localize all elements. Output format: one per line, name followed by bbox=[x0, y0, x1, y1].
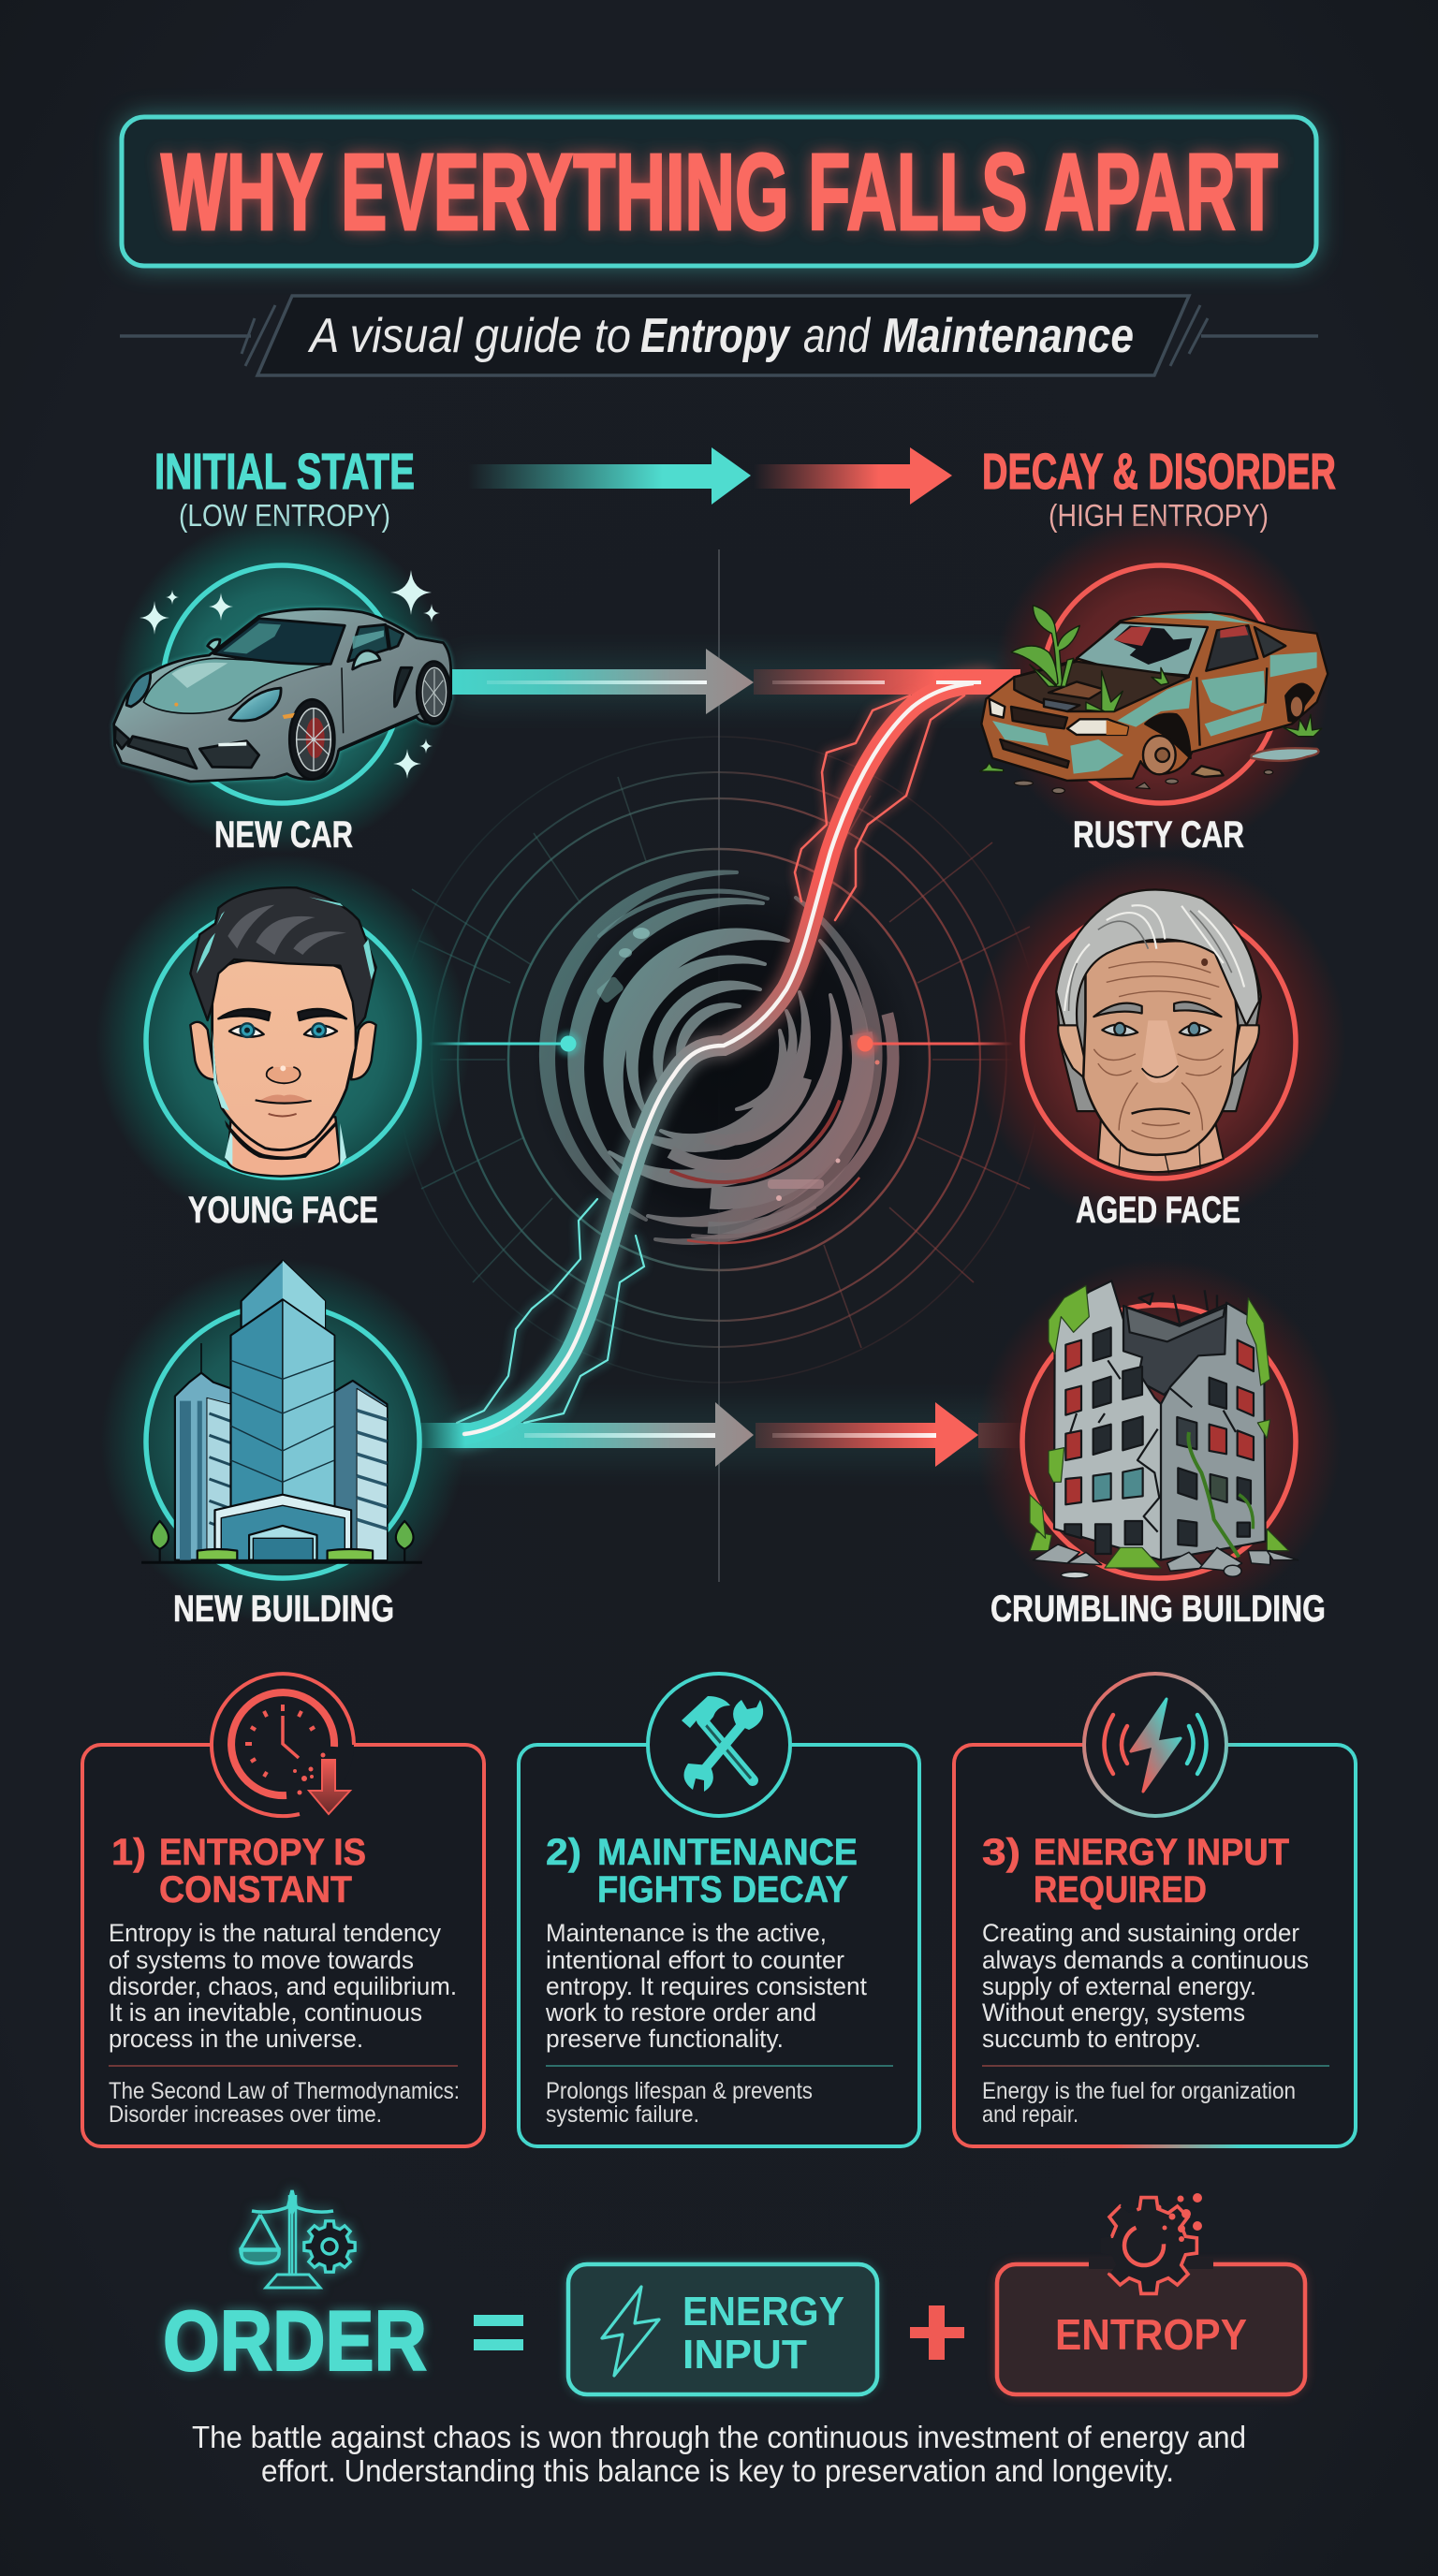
sparkles bbox=[139, 570, 440, 779]
card heading: ENERGY INPUT bbox=[1034, 1832, 1289, 1873]
card body: entropy. It requires consistent bbox=[546, 1972, 867, 2000]
nose and mouth bbox=[267, 1067, 301, 1083]
card body bbox=[545, 1919, 867, 2053]
eyes bbox=[229, 1026, 264, 1037]
brows bbox=[218, 1009, 270, 1020]
closing statement bbox=[192, 2420, 1246, 2488]
interior bbox=[1123, 1304, 1229, 1395]
car body bbox=[114, 608, 451, 782]
label: rusty car: RUSTY CAR bbox=[1073, 814, 1244, 856]
wrinkles bbox=[1093, 962, 1224, 1138]
central entropy vortex diagram bbox=[396, 549, 1042, 1582]
label: young face: YOUNG FACE bbox=[188, 1190, 378, 1231]
card body: Entropy is the natural tendency bbox=[109, 1919, 441, 1947]
subtitle banner: Entropy bbox=[640, 309, 791, 363]
card note bbox=[546, 2078, 813, 2128]
label: aged face: AGED FACE bbox=[1076, 1190, 1240, 1231]
card body: disorder, chaos, and equilibrium. bbox=[109, 1972, 457, 2000]
cracks bbox=[1070, 1360, 1236, 1532]
card heading: ENTROPY IS bbox=[159, 1832, 366, 1873]
illustration: aged face bbox=[972, 855, 1346, 1229]
panel: entropy is constant bbox=[82, 1674, 484, 2146]
centre line bbox=[718, 549, 720, 1582]
closing statement: effort. Understanding this balance is key to preservation and longevity. bbox=[261, 2453, 1174, 2488]
equation: entropy box bbox=[997, 2193, 1305, 2394]
card note: systemic failure. bbox=[546, 2101, 699, 2128]
icon: lightning with waves bbox=[1084, 1674, 1226, 1816]
nose and mouth bbox=[1142, 1020, 1179, 1083]
card body: Maintenance is the active, bbox=[546, 1919, 827, 1947]
heading: decay and disorder: (HIGH ENTROPY) bbox=[1049, 498, 1269, 533]
icon: clock with decay arrow bbox=[212, 1674, 354, 1816]
illustration: rusty car bbox=[936, 516, 1329, 853]
row arrow: car bbox=[449, 649, 1016, 714]
card body: intentional effort to counter bbox=[546, 1946, 844, 1974]
card heading: 3) bbox=[982, 1832, 1020, 1873]
card note: Disorder increases over time. bbox=[109, 2101, 382, 2128]
subtitle banner: A visual guide to bbox=[307, 309, 631, 363]
equation: energy input box: ENERGY bbox=[682, 2289, 844, 2334]
row arrow: building bbox=[420, 1402, 1023, 1467]
hair bbox=[190, 887, 376, 1030]
subtitle banner bbox=[120, 296, 1318, 375]
card heading: 1) bbox=[111, 1832, 146, 1873]
card body: of systems to move towards bbox=[109, 1946, 414, 1974]
illustration: new car bbox=[113, 516, 451, 853]
card body bbox=[982, 1919, 1309, 2053]
equation: energy input box bbox=[568, 2264, 877, 2394]
face bbox=[1083, 941, 1238, 1155]
vortex core shadow bbox=[529, 871, 922, 1264]
card body: Without energy, systems bbox=[982, 1998, 1245, 2027]
vines bbox=[1188, 1432, 1239, 1557]
card body: supply of external energy. bbox=[982, 1972, 1256, 2000]
card body: preserve functionality. bbox=[546, 2025, 784, 2053]
vortex lower-right bands bbox=[514, 849, 932, 1266]
right node connector bbox=[852, 1031, 1021, 1057]
right wall bbox=[1161, 1303, 1266, 1560]
car body bbox=[980, 606, 1328, 794]
illustration: crumbling building bbox=[976, 1259, 1342, 1624]
label: new car: NEW CAR bbox=[214, 814, 353, 856]
card body: It is an inevitable, continuous bbox=[109, 1998, 422, 2027]
hair top bbox=[1056, 889, 1259, 1025]
card note bbox=[109, 2078, 460, 2128]
label: new building: NEW BUILDING bbox=[173, 1588, 394, 1630]
card note: Energy is the fuel for organization bbox=[982, 2078, 1296, 2104]
label: crumbling building: CRUMBLING BUILDING bbox=[990, 1588, 1326, 1630]
panel: energy input required bbox=[954, 1674, 1356, 2146]
card note: Prolongs lifespan & prevents bbox=[546, 2078, 813, 2104]
card body: Creating and sustaining order bbox=[982, 1919, 1299, 1947]
red lightning branches bbox=[795, 695, 964, 920]
equation: plus sign bbox=[910, 2305, 964, 2360]
card body: succumb to entropy. bbox=[982, 2025, 1201, 2053]
illustration: young face bbox=[95, 855, 470, 1229]
top gradient arrow bbox=[468, 447, 952, 505]
hair back bbox=[1056, 889, 1261, 1111]
vortex texture specks bbox=[595, 928, 880, 1201]
teal lightning branches bbox=[457, 1199, 644, 1423]
equation: entropy box: ENTROPY bbox=[1055, 2310, 1247, 2359]
card note: The Second Law of Thermodynamics: bbox=[109, 2078, 460, 2104]
card note: and repair. bbox=[982, 2101, 1078, 2128]
illustration: new building bbox=[100, 1259, 465, 1624]
card body: always demands a continuous bbox=[982, 1946, 1309, 1974]
card heading bbox=[982, 1832, 1289, 1910]
left wall bbox=[1054, 1281, 1161, 1560]
subtitle banner: and bbox=[803, 309, 872, 363]
card heading: REQUIRED bbox=[1034, 1869, 1207, 1910]
card note bbox=[982, 2078, 1296, 2128]
rubble bbox=[1033, 1544, 1299, 1578]
heading: initial state bbox=[154, 444, 415, 533]
icon: lightning bbox=[602, 2287, 659, 2376]
windows bbox=[1064, 1327, 1254, 1554]
card body bbox=[109, 1919, 457, 2053]
brows bbox=[1093, 1003, 1142, 1017]
plants bbox=[980, 606, 1322, 771]
vortex swirl bbox=[541, 871, 881, 1243]
debris and puddle bbox=[1252, 748, 1319, 761]
radar rings bbox=[396, 737, 1042, 1383]
equation: energy input box: INPUT bbox=[682, 2332, 807, 2378]
card heading: CONSTANT bbox=[159, 1869, 352, 1910]
left node connector bbox=[419, 1032, 580, 1056]
subtitle banner: Maintenance bbox=[883, 309, 1134, 363]
icon: disintegrating gear bbox=[1101, 2193, 1202, 2293]
card heading bbox=[546, 1832, 858, 1910]
heading: decay and disorder bbox=[982, 444, 1336, 533]
row beam end bbox=[974, 669, 1020, 695]
title banner bbox=[122, 117, 1316, 266]
icon: balance scale and gear bbox=[241, 2190, 355, 2288]
equation: order: ORDER bbox=[163, 2294, 427, 2389]
eyes bbox=[1102, 1025, 1137, 1035]
heading: initial state: INITIAL STATE bbox=[154, 444, 415, 500]
card heading: 2) bbox=[546, 1832, 581, 1873]
card heading: MAINTENANCE bbox=[597, 1832, 858, 1873]
icon: hammer and wrench bbox=[648, 1674, 790, 1816]
closing statement: The battle against chaos is won through the continuous investment of energy and bbox=[192, 2420, 1246, 2454]
card heading: FIGHTS DECAY bbox=[597, 1869, 848, 1910]
card heading bbox=[111, 1832, 366, 1910]
card body: work to restore order and bbox=[545, 1998, 816, 2027]
card body: process in the universe. bbox=[109, 2025, 363, 2053]
S-curve energy stream bbox=[457, 682, 983, 1435]
heading: initial state: (LOW ENTROPY) bbox=[179, 498, 390, 533]
equation: order: ORDER bbox=[163, 2294, 427, 2389]
equation: equals sign bbox=[474, 2315, 523, 2350]
panel: maintenance fights decay bbox=[519, 1674, 919, 2146]
